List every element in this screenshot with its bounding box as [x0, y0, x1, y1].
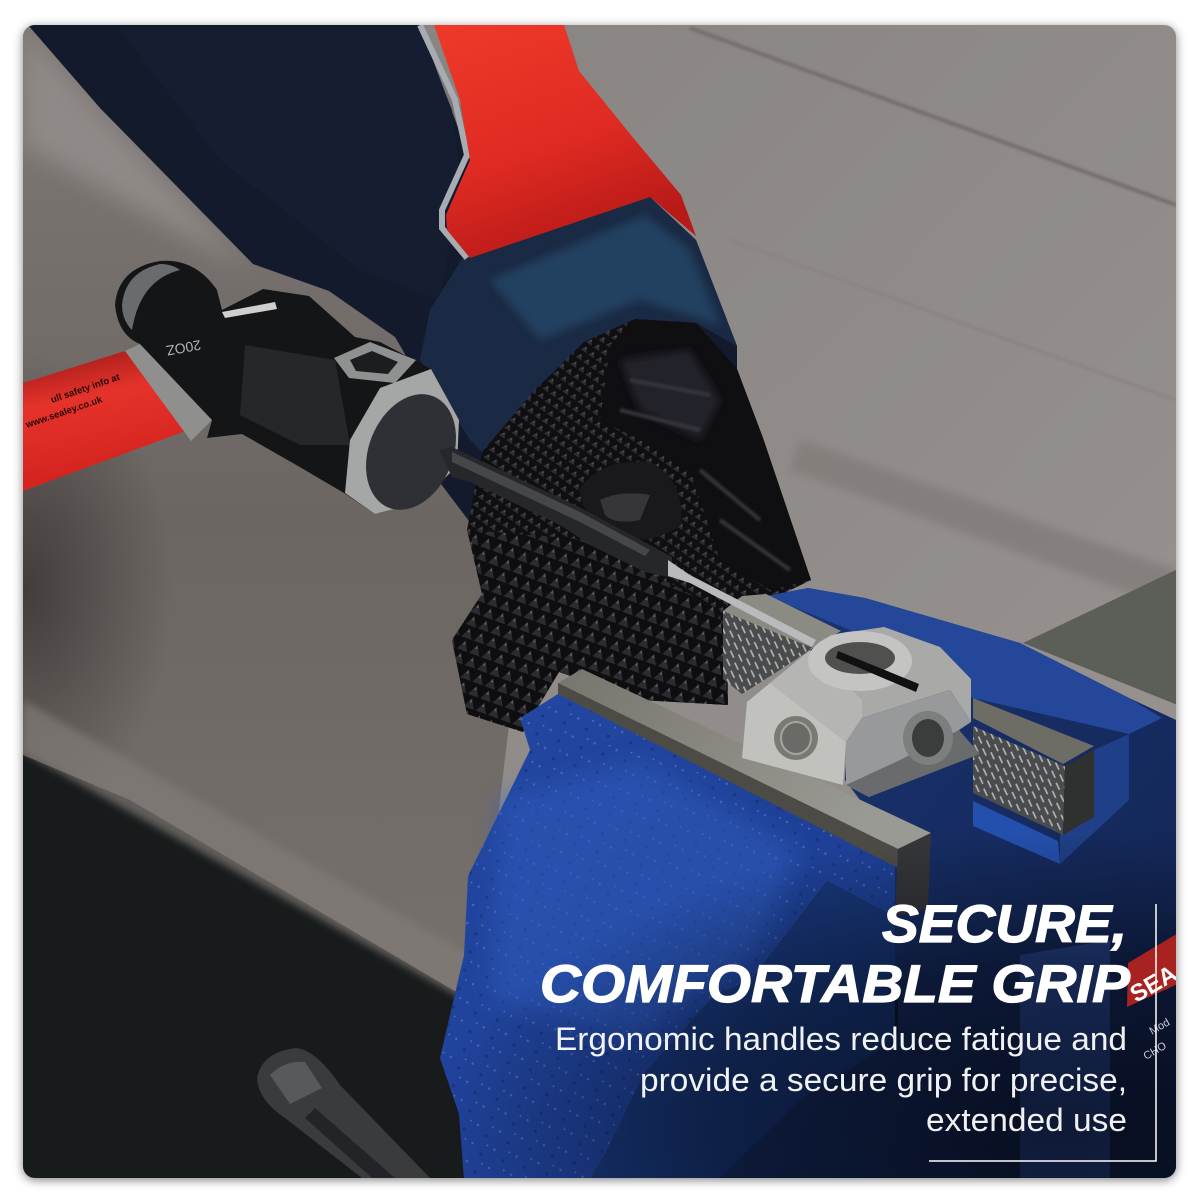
anvil top	[1023, 568, 1180, 706]
background wall left	[23, 25, 1176, 1010]
body text: extended use	[926, 1102, 1127, 1138]
body text: provide a secure grip for precise,	[640, 1062, 1127, 1098]
hammer head weight label: 20OZ	[165, 337, 202, 359]
heading: SECURE,	[882, 895, 1127, 954]
chisel	[439, 447, 816, 647]
red handle of hammer: www.sealey.co.uk	[23, 394, 105, 431]
hammer head	[115, 261, 472, 523]
caption frame lines	[929, 904, 1156, 1161]
bench vise	[440, 568, 1180, 1180]
heading: COMFORTABLE GRIP	[540, 955, 1131, 1014]
red sleeve patch	[434, 25, 696, 258]
vise brand badge: CHO	[1142, 1040, 1169, 1063]
front vise body	[440, 694, 895, 1180]
dark floor	[23, 700, 470, 1178]
black glove with grip texture	[452, 319, 811, 732]
body text	[555, 1021, 1127, 1138]
front steel jaw	[558, 669, 931, 849]
dark area behind caption	[440, 830, 1176, 1178]
rear jaw right	[973, 698, 1094, 764]
rear jaw left	[723, 611, 813, 694]
glove back of hand wrinkles	[600, 319, 811, 590]
sleeve reflective stripe	[420, 25, 467, 258]
vise brand badge: SEA	[1126, 960, 1182, 1008]
vise dark cavity	[895, 1000, 898, 1034]
chisel end foreground	[257, 1048, 430, 1178]
aluminium workpiece	[742, 627, 980, 797]
lower fingers	[452, 530, 728, 732]
vise brand badge: Mod	[1148, 1017, 1172, 1038]
red handle of hammer	[23, 344, 212, 491]
vise brand badge	[1127, 934, 1176, 1058]
thumb	[579, 462, 681, 540]
sleeve navy	[28, 25, 737, 525]
vise rear body	[700, 588, 1176, 1178]
red handle of hammer: ull safety info at	[49, 372, 122, 406]
body text: Ergonomic handles reduce fatigue and	[555, 1021, 1127, 1057]
knitted cuff	[420, 197, 737, 452]
heading	[540, 895, 1131, 1014]
